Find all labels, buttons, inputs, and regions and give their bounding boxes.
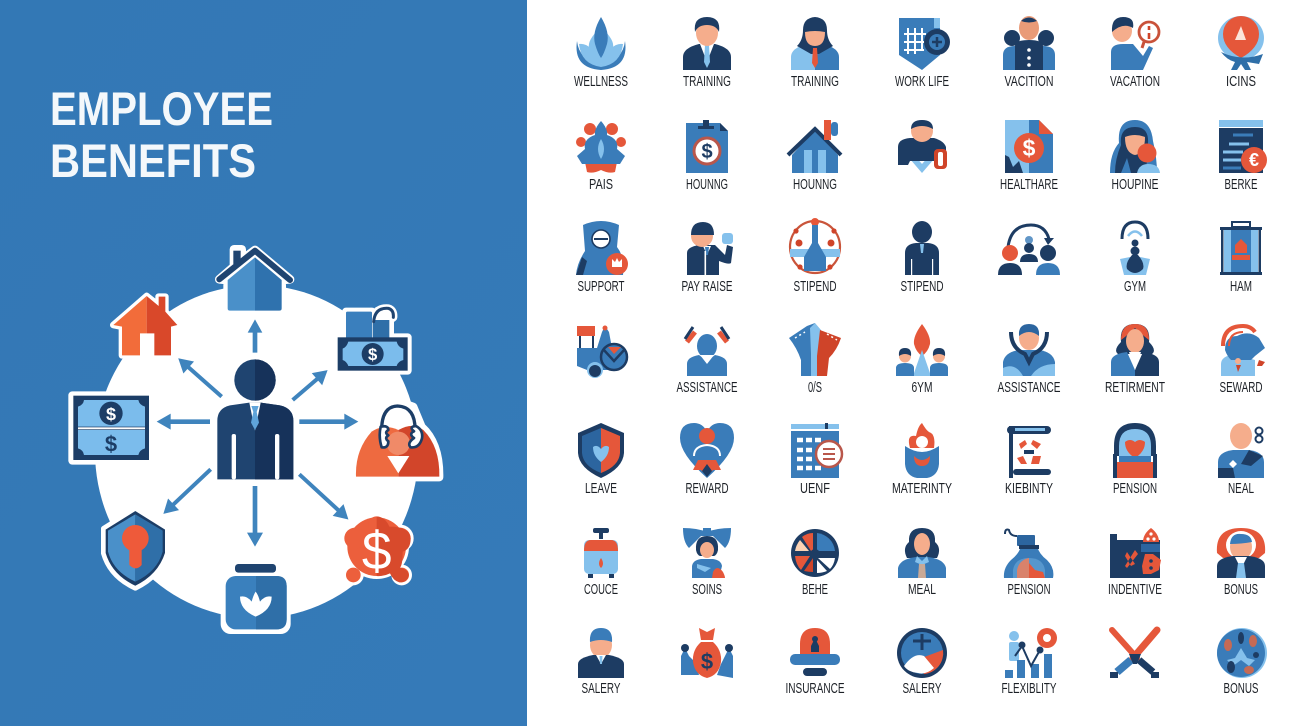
tile: insurance — [786, 628, 845, 697]
tile: salery man: SALERY — [582, 681, 621, 697]
icon: money and lock: $ — [368, 345, 378, 364]
tile: neal: NEAL — [1228, 481, 1254, 497]
tile: work life — [895, 18, 950, 90]
tile: healthare: HEALTHARE — [1000, 177, 1058, 193]
tile: hands with money bag — [681, 628, 733, 678]
tile: reward — [680, 423, 734, 497]
tile: gym — [1120, 222, 1150, 295]
tile: wellness: WELLNESS — [574, 74, 628, 90]
tile: vacition — [1003, 16, 1055, 90]
icon: headset bag — [356, 403, 439, 477]
tile: person with tag — [898, 120, 947, 173]
icon: dollar badge — [344, 516, 411, 582]
tile: cart — [577, 326, 628, 378]
tile: hounng house — [788, 120, 841, 193]
tile: salery circle: SALERY — [902, 681, 942, 697]
tile: stipend man: STIPEND — [900, 279, 944, 295]
tile: ham: HAM — [1230, 279, 1252, 295]
tile: support: SUPPORT — [578, 279, 625, 295]
tile: berke — [1219, 120, 1267, 193]
tile: uenf calendar — [791, 423, 842, 497]
tile: ham — [1220, 222, 1262, 295]
icon: money and lock — [338, 308, 408, 371]
tile: bonus ring — [1217, 528, 1265, 598]
tile: salery circle — [897, 628, 947, 697]
tile: couce — [584, 528, 618, 598]
tile: houpine — [1110, 120, 1160, 193]
tile: assistance dumbbells — [676, 327, 738, 396]
tile: bonus ring: BONUS — [1224, 582, 1258, 598]
tile: materinty — [892, 423, 952, 497]
tile: neal — [1218, 423, 1264, 497]
tile: houpine: HOUPINE — [1112, 177, 1159, 193]
tile: assistance person: ASSISTANCE — [998, 380, 1061, 396]
tile: training woman — [791, 17, 839, 90]
tile: couce: COUCE — [584, 582, 618, 598]
tile: vacation: VACATION — [1110, 74, 1160, 90]
tile: behe wheel: BEHE — [802, 582, 828, 598]
panel: left blue background — [0, 0, 527, 726]
tile: materinty: MATERINTY — [892, 481, 952, 497]
tile: pension dome: PENSION — [1113, 481, 1157, 497]
tile: indentive — [1108, 528, 1162, 598]
tile: bonus sphere: BONUS — [1224, 681, 1258, 697]
tile: meal: MEAL — [908, 582, 936, 598]
tile: team with arc arrow — [998, 225, 1060, 275]
tile: uenf calendar: UENF — [800, 481, 830, 497]
tile: hounng clipboard: HOUNNG — [686, 177, 728, 193]
tile: insurance: INSURANCE — [786, 681, 845, 697]
tile: meal — [898, 528, 946, 598]
title: EMPLOYEE — [50, 82, 273, 135]
icon: banknotes — [68, 391, 153, 465]
tile: pension dome — [1113, 423, 1157, 497]
tile: pais — [576, 121, 626, 193]
tile: crossed tools — [1110, 630, 1159, 678]
icon: dollar badge: $ — [362, 522, 391, 581]
tile: leave: LEAVE — [585, 481, 617, 497]
tile: pay raise — [682, 222, 733, 295]
tile: indentive: INDENTIVE — [1108, 582, 1162, 598]
tile: training man — [683, 17, 731, 90]
tile: support — [576, 221, 628, 295]
title: BENEFITS — [50, 134, 256, 187]
tile: gym: GYM — [1124, 279, 1146, 295]
tile: seward — [1220, 326, 1265, 396]
tile: kiebinty — [1005, 426, 1053, 497]
icon: central employee — [217, 359, 293, 479]
icon: banknotes: $ — [106, 404, 116, 424]
tile: soins — [683, 528, 731, 598]
tile: pay raise: PAY RAISE — [682, 279, 733, 295]
tile: hands with money bag: $ — [701, 649, 713, 674]
tile: hounng clipboard — [686, 120, 728, 193]
tile: group with flame — [896, 324, 948, 396]
tile: pais: PAIS — [589, 177, 613, 193]
tile: healthare: $ — [1023, 135, 1036, 161]
tile: salery man — [578, 628, 624, 697]
tile: assistance person — [998, 324, 1061, 396]
tile: assistance dumbbells: ASSISTANCE — [676, 380, 738, 396]
tile: vacation — [1110, 17, 1160, 90]
tile: berke: € — [1249, 150, 1259, 170]
tile: stipend ring — [790, 218, 840, 295]
tile: icins: ICINS — [1226, 74, 1256, 90]
tile: pension bottle — [1004, 530, 1053, 598]
tile: stipend ring: STIPEND — [794, 279, 836, 295]
tile: healthare — [1000, 120, 1058, 193]
arrows — [157, 319, 358, 547]
tile: work life: WORK LIFE — [895, 74, 949, 90]
tile: wellness — [574, 17, 628, 90]
icon: orange house — [113, 296, 177, 355]
tile: kiebinty: KIEBINTY — [1005, 481, 1053, 497]
hub diagram — [68, 249, 439, 634]
tile: reward: REWARD — [686, 481, 728, 497]
tile: training man: TRAINING — [683, 74, 731, 90]
panel: icon grid — [574, 16, 1267, 697]
icon: blue house — [219, 249, 290, 311]
icon: jar with leaf — [221, 559, 291, 634]
tile: pension bottle: PENSION — [1008, 582, 1050, 598]
tile: hounng clipboard: $ — [701, 141, 713, 163]
title — [50, 82, 273, 187]
tile: behe wheel — [791, 529, 839, 598]
tile: bonus sphere — [1217, 628, 1267, 697]
tile: retirement — [1105, 324, 1165, 396]
tile: flexiblity — [1002, 628, 1057, 697]
tile: stipend man — [900, 221, 944, 295]
tile: seward: SEWARD — [1220, 380, 1262, 396]
tile: icins — [1218, 16, 1264, 90]
icon: banknotes: $ — [105, 431, 117, 456]
icon: shield with keyhole — [103, 508, 167, 588]
tile: vacition: VACITION — [1004, 74, 1054, 90]
tile: berke: BERKE — [1224, 177, 1258, 193]
tile: hounng house: HOUNNG — [793, 177, 837, 193]
tile: retirement: RETIRMENT — [1105, 380, 1165, 396]
tile: raised hands — [789, 323, 841, 396]
tile: flexiblity: FLEXIBLITY — [1002, 681, 1057, 697]
tile: leave — [578, 423, 624, 497]
tile: soins: SOINS — [692, 582, 722, 598]
tile: training woman: TRAINING — [791, 74, 839, 90]
tile: group with flame: 6YM — [912, 380, 932, 396]
tile: raised hands: 0/S — [808, 380, 822, 396]
